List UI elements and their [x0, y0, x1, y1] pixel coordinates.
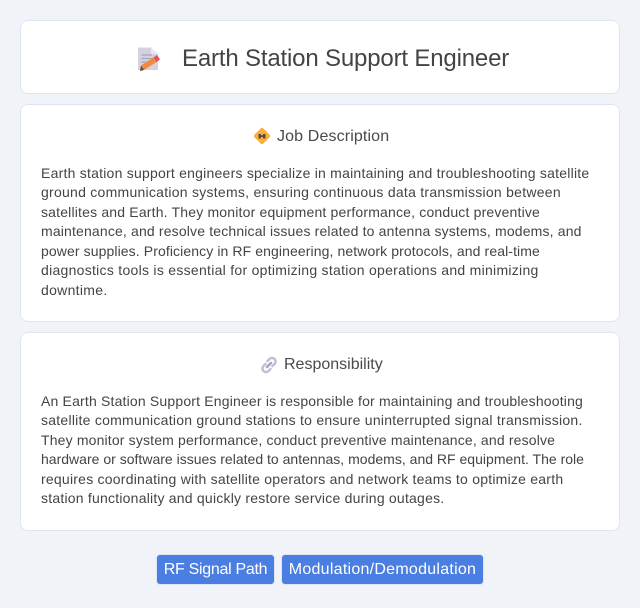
- text block: responsibility: An Earth Station Support Engineer is responsible for maintaining and troubleshooting: [41, 393, 583, 409]
- text block: job description: ground communication systems, ensuring continuous data transmission between: [41, 184, 561, 200]
- text block: responsibility: They monitor system performance, conduct preventive maintenance, and resolve: [41, 432, 555, 448]
- tag: RF Signal Path: RF Signal Path: [164, 561, 267, 578]
- heading: responsibility: Responsibility: [284, 356, 383, 373]
- text block: job description: power supplies. Proficiency in RF engineering, network protocols, and real-time: [41, 243, 540, 259]
- text block: job description: [41, 165, 589, 298]
- icon: document with pencil: [138, 48, 160, 71]
- tag: Modulation/Demodulation: [281, 554, 484, 585]
- panel: job description: [20, 104, 620, 322]
- text block: job description: Earth station support engineers specialize in maintaining and troubleshooting satellite: [41, 165, 589, 181]
- text block: responsibility: station functionality and quickly restore service during outages.: [41, 490, 444, 506]
- icon: chain link: [261, 356, 277, 374]
- icon: orange diamond: [254, 128, 270, 144]
- text block: responsibility: requires coordinating with satellite operators and network teams to optimize earth: [41, 471, 563, 487]
- text block: job description: downtime.: [41, 282, 108, 298]
- title: Earth Station Support Engineer: [182, 45, 509, 72]
- text block: job description: diagnostics tools is essential for optimizing station operations and minimizing: [41, 262, 539, 278]
- tag: Modulation/Demodulation: Modulation/Demodulation: [289, 561, 476, 578]
- panel: responsibility: [20, 332, 620, 531]
- text block: job description: maintenance, and resolve technical issues related to antenna systems, modems, and: [41, 223, 582, 239]
- text block: responsibility: hardware or software issues related to antennas, modems, and RF equipment. The role: [41, 451, 584, 467]
- heading: job description: Job Description: [277, 128, 389, 145]
- tag: RF Signal Path: [156, 554, 275, 585]
- text block: responsibility: satellite communication ground stations to ensure uninterrupted signal transmission.: [41, 412, 583, 428]
- text block: job description: satellites and Earth. They monitor equipment performance, conduct preventive: [41, 204, 540, 220]
- text block: responsibility: [41, 393, 584, 506]
- panel: title card: [20, 20, 620, 94]
